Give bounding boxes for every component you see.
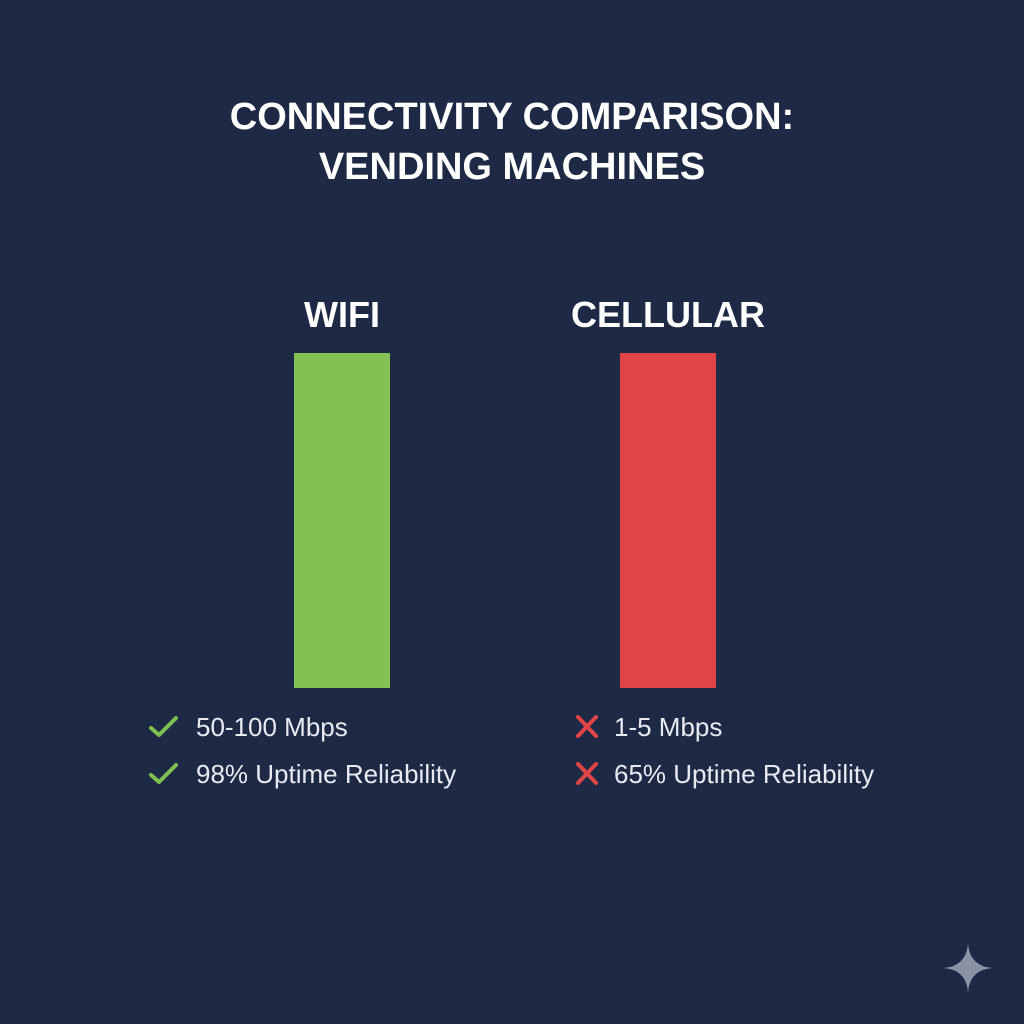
- title: CONNECTIVITY COMPARISON:: [230, 96, 794, 138]
- list: wifi: [148, 712, 456, 789]
- heading: cellular: CELLULAR: [571, 294, 765, 335]
- item: speed: 1-5 Mbps: [614, 712, 722, 742]
- item: uptime: 98% Uptime Reliability: [196, 759, 456, 789]
- bar: wifi: [294, 353, 390, 688]
- item: uptime: 65% Uptime Reliability: [614, 759, 874, 789]
- heading: wifi: WIFI: [304, 294, 380, 335]
- bar: cellular: [620, 353, 716, 688]
- list: cellular: [576, 712, 874, 789]
- title: [230, 96, 794, 188]
- title: VENDING MACHINES: [319, 146, 705, 188]
- item: speed: 50-100 Mbps: [196, 712, 348, 742]
- icon: sparkle: [944, 944, 992, 992]
